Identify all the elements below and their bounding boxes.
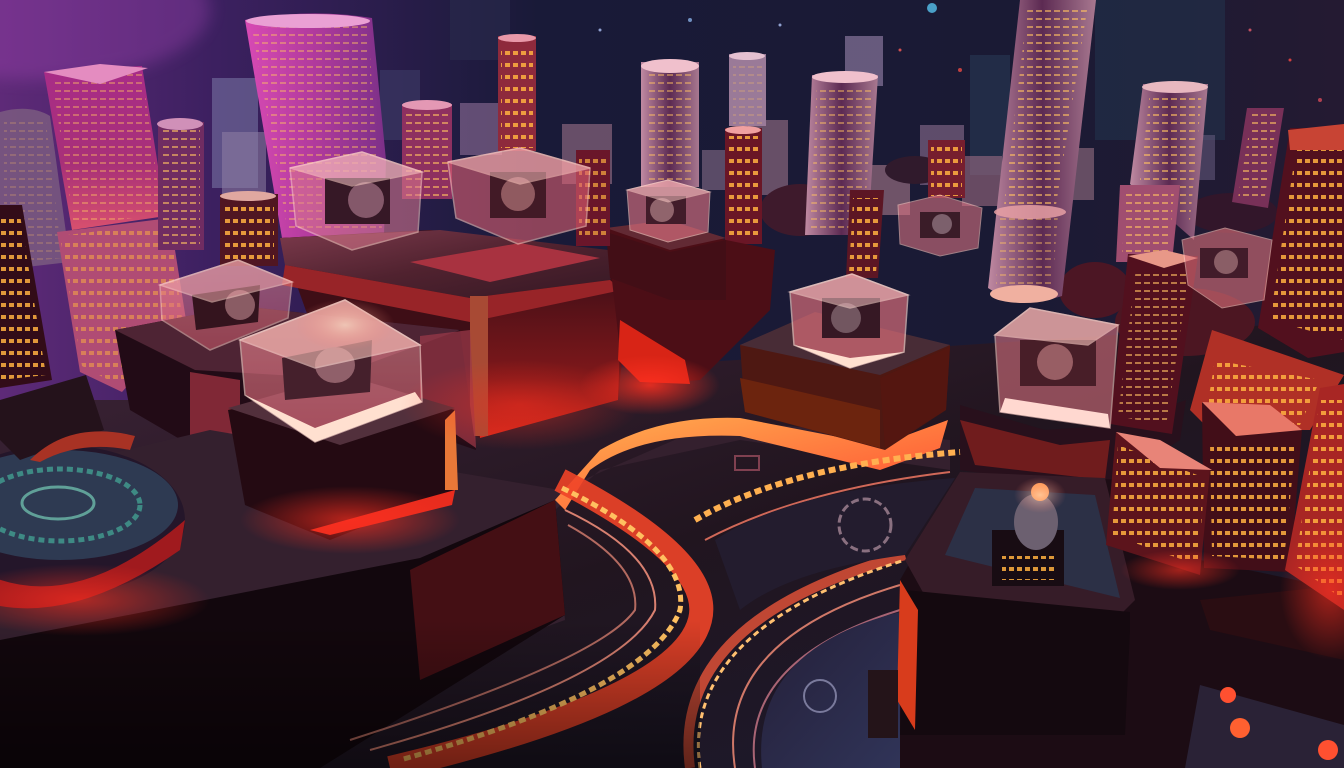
tower: center slim foreground — [576, 150, 884, 278]
tower: tallest glass cylinder — [988, 0, 1096, 303]
cube: upper right small — [898, 195, 982, 256]
cube: right glass large — [995, 308, 1118, 428]
cube: small center — [627, 180, 710, 242]
tower: center cylinders — [641, 52, 965, 244]
towers: front right — [1106, 124, 1344, 610]
platform: main left floor — [0, 418, 950, 768]
tower: far left glass — [0, 109, 70, 270]
cube: top center glass — [448, 148, 590, 244]
glow: light blooms — [0, 299, 1344, 768]
platform: large center red — [280, 230, 625, 438]
device: bottom right module — [1185, 685, 1344, 768]
tower: center slim — [402, 34, 536, 199]
platform: left wide dark — [115, 306, 476, 470]
tower: right glass — [1116, 81, 1284, 262]
cube: far right glass — [1182, 228, 1272, 308]
platform: front right device — [868, 472, 1344, 768]
tower: pink lower left — [57, 218, 186, 392]
platform: right block — [960, 400, 1186, 490]
background glass towers — [212, 36, 1278, 356]
tower: slim dark left — [157, 118, 204, 250]
platform: front left block — [228, 375, 458, 540]
tower: tall magenta left — [44, 64, 166, 230]
floor: main dark surface — [0, 320, 1344, 768]
cube: tan glass top center left — [290, 152, 422, 250]
panel: circuit floor inset — [715, 456, 955, 768]
tower: left small dark — [220, 191, 278, 266]
platform: center tall stack — [606, 220, 775, 384]
cube: front large glass — [240, 300, 422, 442]
platform: center front block — [740, 312, 950, 450]
towers: near left edge — [0, 205, 135, 462]
cube: center right glass — [790, 274, 908, 368]
arcs: glowing circuit rings — [350, 452, 960, 768]
dial: left circular disc — [0, 445, 185, 608]
tower: large pink glass — [245, 13, 386, 238]
cube: left glass — [160, 260, 292, 350]
